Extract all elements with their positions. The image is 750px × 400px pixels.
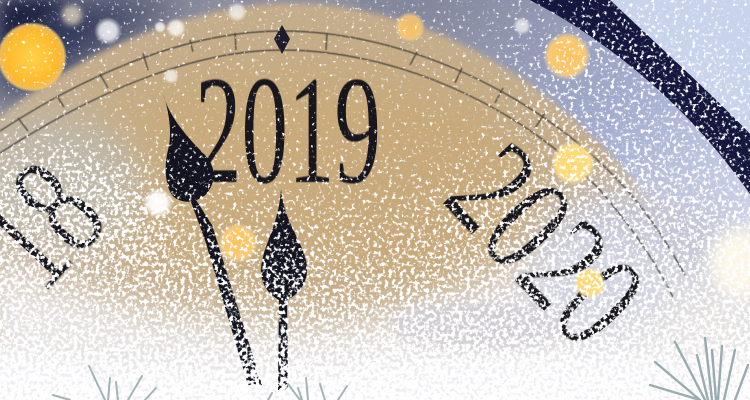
dial minute track [0,31,685,297]
pine branch: bottom centre [268,378,347,400]
dial diamond marker [274,25,290,54]
pine branch: bottom right [650,338,748,400]
clock rim: dark navy band [522,0,750,200]
bokeh lights [0,2,750,299]
snow bank: soft shaded drift [0,245,750,400]
clock hour hand [163,93,262,385]
clock minute hand [261,189,307,390]
pine branch: bottom left [53,366,156,400]
year label: 2020: 2020 [417,115,675,375]
year label: 2019: 2019 [195,44,381,216]
